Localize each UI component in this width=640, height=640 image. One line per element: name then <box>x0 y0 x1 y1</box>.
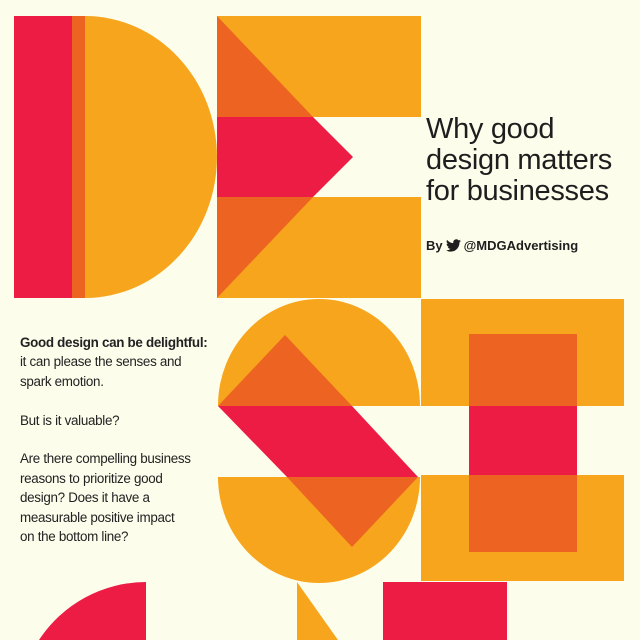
intro text: spark emotion. <box>20 374 104 389</box>
byline with twitter icon: By @MDGAdvertising <box>426 238 578 253</box>
intro text: on the bottom line? <box>20 529 128 544</box>
intro text: Good design can be delightful: <box>20 335 207 350</box>
title: design matters <box>426 144 612 176</box>
letter D <box>14 16 217 298</box>
title <box>426 113 612 207</box>
title: Why good <box>426 113 554 145</box>
letter E <box>217 16 421 298</box>
intro text: design? Does it have a <box>20 490 150 505</box>
letter I/E block <box>421 299 624 581</box>
intro text: But is it valuable? <box>20 413 119 428</box>
bottom partial letters <box>39 582 507 640</box>
intro text: measurable positive impact <box>20 510 174 525</box>
intro text <box>20 335 207 544</box>
intro text: it can please the senses and <box>20 354 181 369</box>
intro text: Are there compelling business <box>20 451 191 466</box>
intro text: reasons to prioritize good <box>20 471 163 486</box>
title: for businesses <box>426 175 609 207</box>
letter S <box>218 299 420 583</box>
